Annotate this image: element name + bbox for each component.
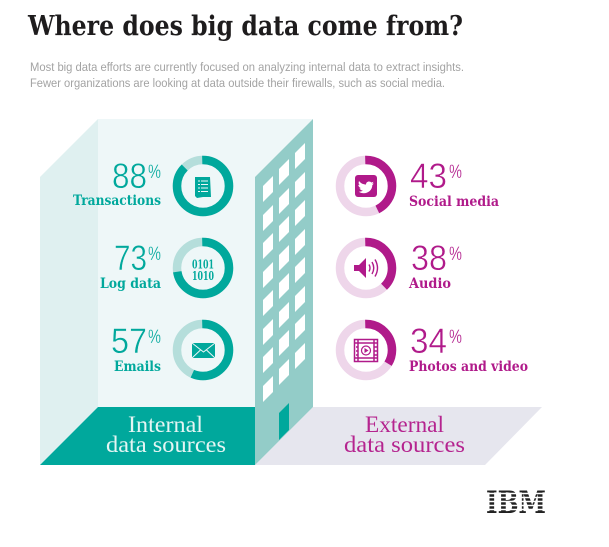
icon: twitter xyxy=(355,175,377,197)
stat: emails 57%: % xyxy=(148,326,161,348)
building xyxy=(40,119,313,465)
icon: envelope xyxy=(192,343,215,358)
stat: audio 38%: % xyxy=(449,243,462,265)
stat: transactions 88%: 88 xyxy=(112,157,147,196)
icon: film strip xyxy=(354,340,378,362)
stat: audio 38%: Audio xyxy=(408,276,451,292)
stat: transactions 88%: % xyxy=(148,161,161,183)
stat: audio 38% xyxy=(340,239,462,294)
logo: IBM: IBM xyxy=(486,485,546,521)
icon: binary digits xyxy=(192,256,214,283)
icon: receipt xyxy=(195,177,211,198)
stat: social media 43%: Social media xyxy=(409,194,499,210)
stat: photos and video 34%: % xyxy=(449,326,462,348)
stat: log data 73%: % xyxy=(148,243,161,265)
panel: internal floor: Internal xyxy=(128,412,203,437)
icon: binary digits: 1010 xyxy=(192,268,214,283)
stat: photos and video 34%: Photos and video xyxy=(409,359,528,375)
panel: external floor xyxy=(255,407,542,465)
stat: log data 73%: Log data xyxy=(100,276,161,292)
stat: emails 57%: Emails xyxy=(114,359,161,375)
stat: photos and video 34%: 34 xyxy=(410,322,447,361)
intro text: Most big data efforts are currently focused on analyzing internal data to extract insights. xyxy=(30,60,464,74)
intro text: Fewer organizations are looking at data outside their firewalls, such as social media. xyxy=(30,76,445,90)
icon: speaker xyxy=(354,258,378,278)
stat: emails 57% xyxy=(111,322,229,376)
stat: audio 38%: 38 xyxy=(411,239,447,278)
stat: log data 73%: 73 xyxy=(114,239,147,278)
stat: transactions 88%: Transactions xyxy=(73,193,161,209)
icon: binary digits: 0101 xyxy=(192,256,214,272)
stat: social media 43%: % xyxy=(449,161,462,183)
stat: social media 43%: 43 xyxy=(410,157,447,196)
panel: internal floor: data sources xyxy=(106,432,226,457)
stat: social media 43% xyxy=(340,157,499,212)
panel: external floor: External xyxy=(365,412,444,437)
panel: external floor: data sources xyxy=(344,432,465,457)
panel: internal floor xyxy=(40,407,255,465)
stat: photos and video 34% xyxy=(340,322,528,376)
stat: log data 73% xyxy=(100,239,229,294)
intro text xyxy=(30,60,464,90)
title: Where does big data come from? xyxy=(27,10,463,42)
stat: emails 57%: 57 xyxy=(111,322,147,361)
stat: transactions 88% xyxy=(73,157,229,212)
